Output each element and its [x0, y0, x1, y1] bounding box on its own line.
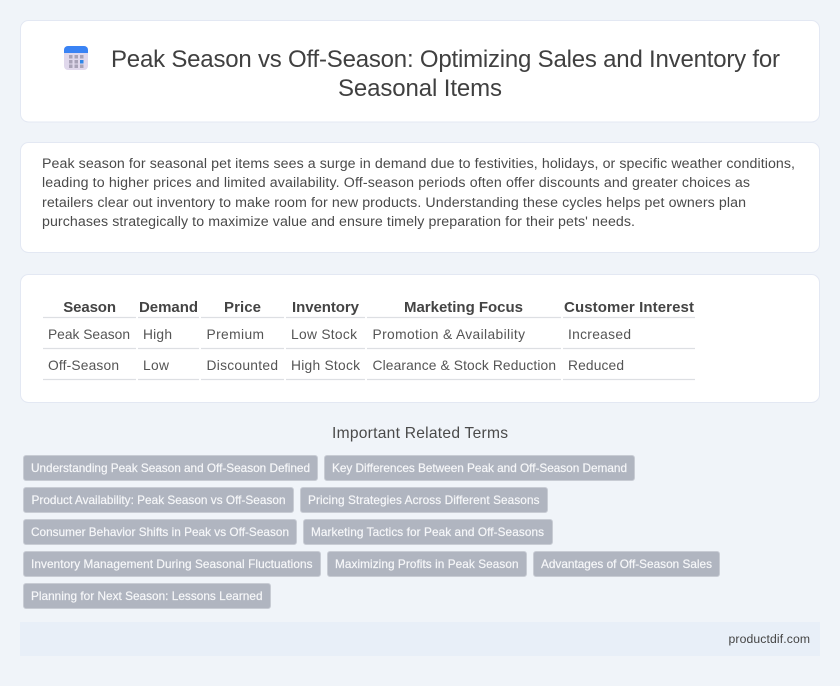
panel: description — [20, 142, 820, 252]
tag — [328, 552, 526, 576]
table header: Season — [63, 299, 116, 316]
table row: peak season: Increased — [568, 327, 631, 342]
tag: Product Availability: Peak Season vs Off-Season — [32, 493, 286, 507]
tag — [300, 488, 548, 512]
tag list: related terms — [24, 456, 720, 608]
tag — [24, 488, 294, 512]
table row: peak season: Low Stock — [291, 327, 357, 342]
tag — [324, 456, 634, 480]
table row: off-season — [48, 358, 624, 373]
tag: Understanding Peak Season and Off-Season Defined — [31, 461, 310, 475]
tag — [534, 552, 720, 576]
tag: Pricing Strategies Across Different Seasons — [308, 493, 540, 507]
table row: off-season: Low — [143, 358, 169, 373]
table header: Marketing Focus — [404, 299, 523, 316]
table header — [63, 299, 694, 316]
text block: description: Peak season for seasonal pet items sees a surge in demand due to festivities, holidays, or specific weather conditions, — [42, 156, 795, 172]
table row: off-season: Discounted — [206, 358, 278, 373]
tag: Key Differences Between Peak and Off-Season Demand — [332, 461, 627, 475]
text block: description: purchases strategically to maximize value and ensure timely preparation for their pets' needs. — [42, 214, 635, 230]
table header: Demand — [139, 299, 198, 316]
table header: Inventory — [292, 299, 360, 316]
title — [111, 46, 780, 102]
tag — [24, 520, 296, 544]
panel: header — [20, 20, 820, 122]
tag — [24, 584, 270, 608]
tag: Advantages of Off-Season Sales — [541, 557, 712, 571]
table row: off-season: Clearance & Stock Reduction — [372, 358, 556, 373]
table row: peak season: High — [143, 327, 172, 342]
title: Peak Season vs Off-Season: Optimizing Sales and Inventory for — [111, 46, 780, 73]
tag: Inventory Management During Seasonal Fluctuations — [31, 557, 313, 571]
table row: peak season — [48, 327, 631, 342]
icon: calendar — [64, 46, 88, 70]
table row: peak season: Promotion & Availability — [372, 327, 525, 342]
heading: related terms: Important Related Terms — [332, 425, 508, 442]
table row: off-season: Reduced — [568, 358, 624, 373]
table row: off-season: Off-Season — [48, 358, 119, 373]
tag: Maximizing Profits in Peak Season — [335, 557, 518, 571]
tag: Marketing Tactics for Peak and Off-Seasons — [311, 525, 544, 539]
tag: Consumer Behavior Shifts in Peak vs Off-Season — [31, 525, 289, 539]
table header: Price — [224, 299, 261, 316]
footer: productdif.com — [728, 632, 810, 646]
tag — [24, 456, 318, 480]
tag — [24, 552, 320, 576]
text block: description: retailers clear out inventory to make room for new products. Understanding these cycles helps pet owners plan — [42, 195, 746, 211]
footer — [20, 622, 820, 656]
table row: peak season: Premium — [206, 327, 264, 342]
panel: comparison table — [20, 274, 820, 402]
title: Seasonal Items — [338, 75, 502, 102]
tag — [304, 520, 552, 544]
text block: description: leading to higher prices and limited availability. Off-season periods often offer discounts and greater choices as — [42, 175, 750, 191]
text block: description — [42, 156, 795, 230]
table header: Customer Interest — [564, 299, 694, 316]
tag: Planning for Next Season: Lessons Learned — [31, 589, 262, 603]
table row: peak season: Peak Season — [48, 327, 130, 342]
table row: off-season: High Stock — [291, 358, 360, 373]
